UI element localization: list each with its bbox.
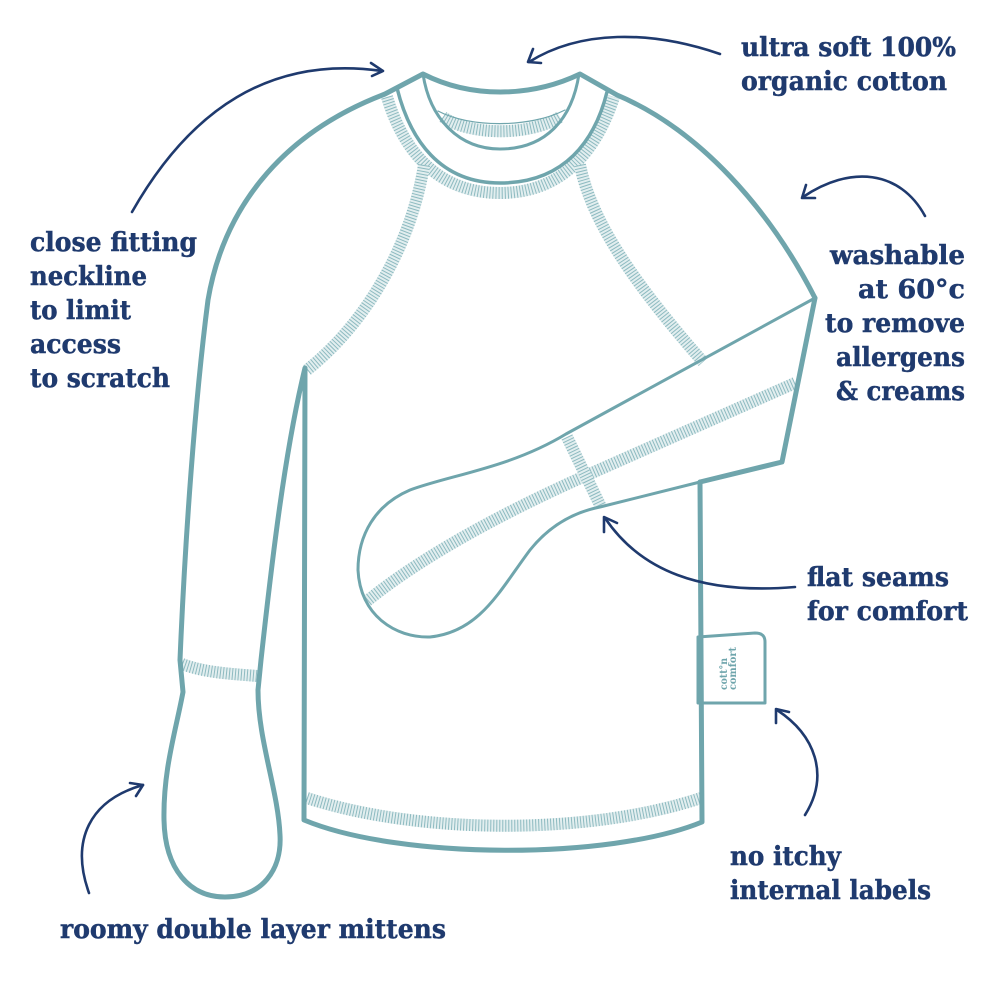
text: washable: at 60°c bbox=[858, 275, 965, 305]
arrow: flat seams bbox=[604, 517, 795, 588]
text: labels: no itchy bbox=[730, 842, 842, 872]
side label: cott°n bbox=[719, 657, 730, 690]
text: washable: & creams bbox=[836, 377, 965, 407]
text: cotton bbox=[741, 33, 956, 97]
arrow: cotton bbox=[528, 37, 720, 63]
text: neckline: neckline bbox=[30, 262, 147, 292]
body outline bbox=[164, 74, 815, 897]
arrow: neckline bbox=[132, 63, 383, 212]
side label: comfort bbox=[728, 647, 739, 690]
raglan seams bbox=[307, 165, 703, 370]
text: labels: internal labels bbox=[730, 876, 931, 906]
neck seams bbox=[387, 97, 614, 193]
text: neckline: to scratch bbox=[30, 364, 170, 394]
text: flat seams: for comfort bbox=[807, 597, 968, 627]
text: cotton: organic cotton bbox=[741, 67, 947, 97]
sleeve seams bbox=[182, 383, 795, 676]
sleeve outline bbox=[358, 298, 815, 637]
text: labels bbox=[730, 842, 931, 906]
arrow: washable bbox=[802, 177, 925, 216]
text: washable bbox=[825, 241, 965, 407]
text: neckline bbox=[30, 228, 197, 394]
text: washable: allergens bbox=[836, 343, 965, 373]
text: cotton: ultra soft 100% bbox=[741, 33, 956, 63]
text: mittens: roomy double layer mittens bbox=[60, 915, 446, 945]
arrow: mittens bbox=[82, 783, 143, 893]
text: neckline: access bbox=[30, 330, 121, 360]
text: neckline: to limit bbox=[30, 296, 131, 326]
side label bbox=[698, 633, 765, 703]
text: washable: to remove bbox=[825, 309, 965, 339]
garment illustration bbox=[164, 74, 815, 897]
inner neckline bbox=[397, 74, 607, 183]
arrow: labels bbox=[776, 709, 817, 815]
text: flat seams bbox=[807, 563, 968, 627]
text: flat seams: flat seams bbox=[807, 563, 949, 593]
text: washable: washable bbox=[829, 241, 965, 271]
text: neckline: close fitting bbox=[30, 228, 197, 258]
hem seam bbox=[307, 798, 701, 826]
